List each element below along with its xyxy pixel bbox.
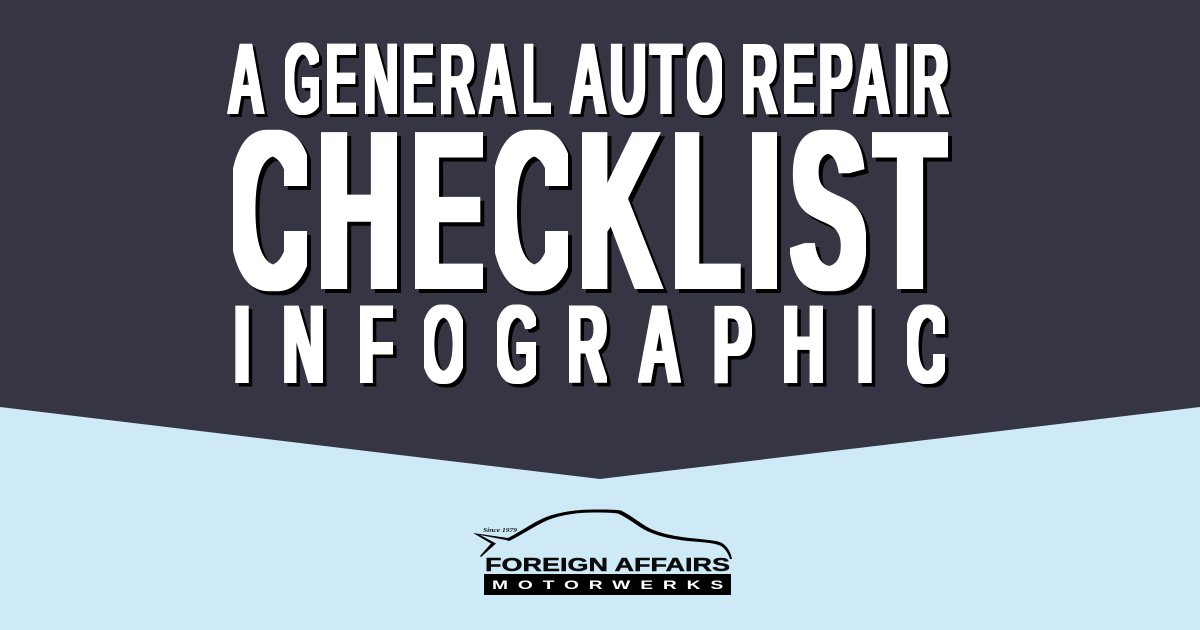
since tagline: Since 1979: [483, 527, 518, 534]
black bar: [484, 574, 731, 595]
logo: Foreign Affairs Motorwerks: [473, 510, 732, 595]
wordmark: Motorwerks: MOTORWERKS: [492, 579, 724, 592]
title line: A General Auto Repair: A GENERAL AUTO REPAIR: [228, 23, 948, 137]
title line: Checklist: CHECKLIST: [230, 83, 944, 338]
icon: car silhouette outline: [473, 510, 732, 559]
title line: Checklist: [233, 130, 952, 296]
dark chevron header panel: [0, 0, 1200, 479]
title line: Infographic: INFOGRAPHIC: [234, 281, 947, 407]
wordmark: Foreign Affairs: FOREIGN AFFAIRS: [485, 554, 730, 575]
title line: Infographic: [235, 304, 948, 388]
